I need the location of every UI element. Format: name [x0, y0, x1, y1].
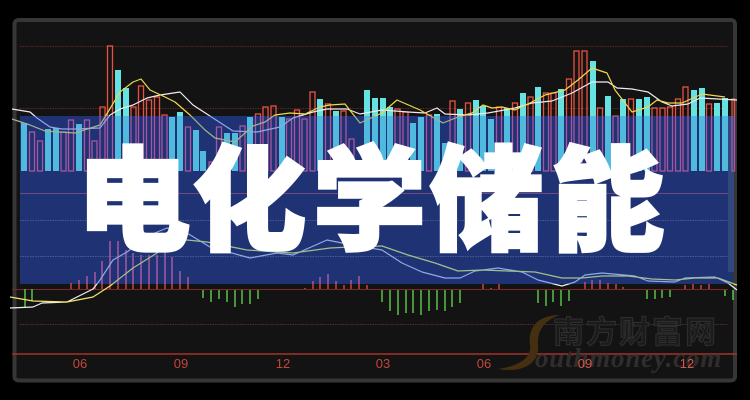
x-axis month labels: 12 — [276, 356, 290, 371]
volume bars: outlined — [30, 46, 734, 171]
x-axis month labels: 09 — [578, 356, 592, 371]
MACD histogram — [25, 241, 733, 315]
blue title band — [20, 116, 733, 284]
grid lines — [12, 46, 737, 354]
x-axis month labels: 12 — [680, 356, 694, 371]
volume bars: filled — [21, 61, 728, 171]
right frame inside band — [728, 116, 734, 272]
x-axis month labels: 06 — [477, 356, 491, 371]
moving average lines lower — [10, 228, 737, 308]
moving average lines upper — [10, 68, 737, 308]
watermark: southmoney logo — [498, 315, 722, 373]
watermark url: outhmoney.com — [535, 343, 722, 373]
title: 电化学储能 — [77, 139, 664, 265]
x-axis month labels — [73, 356, 694, 371]
watermark chinese name: 南方财富网 — [553, 315, 718, 350]
watermark swoosh S — [498, 315, 560, 370]
x-axis month labels: 09 — [174, 356, 188, 371]
x-axis month labels: 06 — [73, 356, 87, 371]
x-axis month labels: 03 — [376, 356, 390, 371]
